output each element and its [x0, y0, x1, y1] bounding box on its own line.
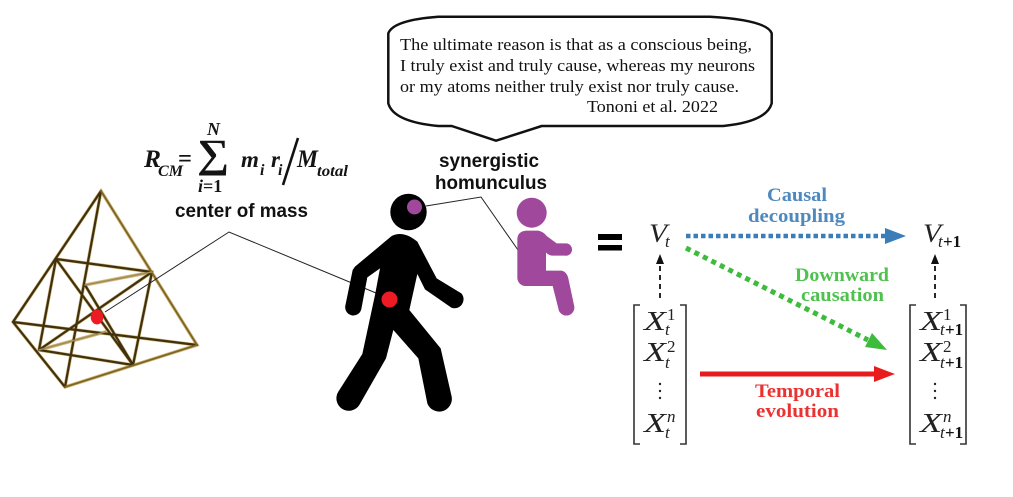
label: causal decoupling: [748, 185, 846, 227]
V t: V: [649, 219, 671, 248]
formula: center of mass: R: [143, 146, 161, 173]
matrix: X t+1: [910, 305, 966, 444]
matrix: X t: X: [643, 306, 668, 336]
arrow: downward causation: [686, 248, 887, 350]
matrix: X t: t: [665, 320, 671, 339]
matrix: X t+1: +1: [945, 353, 963, 372]
matrix: X t+1: t: [940, 353, 946, 372]
matrix: X t: 1: [667, 305, 676, 324]
V t+1: +1: [943, 232, 961, 251]
icon: red center of mass on person: [382, 292, 398, 308]
label: downward causation: Downward: [795, 265, 889, 286]
label: temporal evolution: evolution: [756, 401, 839, 422]
V t: [649, 219, 671, 251]
speech bubble: Tononi et al. 2022: [587, 97, 718, 116]
matrix: X t+1: 1: [943, 305, 952, 324]
V t: t: [665, 232, 671, 251]
label: synergistic homunculus: synergistic: [439, 151, 539, 172]
label: causal decoupling: Causal: [767, 185, 827, 206]
connector: homunculus: [426, 197, 518, 250]
arrow: X t to V t: [656, 254, 664, 298]
speech bubble: [388, 17, 772, 141]
formula: center of mass: CM: [158, 163, 184, 180]
matrix: X t: [634, 305, 686, 444]
matrix: X t+1: +1: [945, 423, 963, 442]
label: center of mass: center of mass: [175, 201, 308, 222]
label: downward causation: [795, 265, 889, 306]
speech bubble: The ultimate reason is that as a conscious being,: [400, 35, 752, 54]
formula: center of mass: N: [206, 119, 221, 139]
matrix: X t+1: X: [919, 306, 944, 336]
arrow: X t+1 to V t+1: [931, 254, 939, 298]
formula: center of mass: total: [317, 163, 349, 180]
formula: center of mass: [143, 119, 349, 196]
formula: center of mass: =1: [203, 176, 222, 196]
matrix: X t: n: [667, 407, 676, 426]
label: downward causation: causation: [801, 285, 884, 306]
V t+1: V: [923, 219, 945, 248]
label: temporal evolution: [755, 381, 840, 422]
matrix: X t: X: [643, 337, 668, 367]
connector: center of mass: [105, 232, 376, 312]
matrix: X t+1: X: [919, 337, 944, 367]
label: synergistic homunculus: homunculus: [435, 173, 547, 194]
arrow: causal decoupling: [686, 228, 906, 244]
matrix: X t: t: [665, 423, 671, 442]
formula: center of mass: =: [178, 146, 192, 172]
matrix: X t+1: t: [940, 423, 946, 442]
icon: homunculus dot in head: [407, 200, 422, 214]
matrix: X t+1: X: [919, 408, 944, 438]
formula: center of mass: i: [260, 162, 265, 179]
formula: center of mass: M: [296, 146, 319, 173]
icon: walking person: [336, 194, 464, 412]
matrix: X t+1: +1: [945, 320, 963, 339]
speech bubble: or my atoms neither truly exist nor truly cause.: [400, 77, 739, 96]
matrix: X t+1: 2: [943, 337, 952, 356]
matrix: X t+1: t: [940, 320, 946, 339]
formula: center of mass: ∑: [197, 131, 229, 176]
arrow: temporal evolution: [700, 366, 895, 382]
formula: center of mass: i: [198, 176, 203, 196]
V t+1: [923, 219, 961, 251]
matrix: X t: 2: [667, 337, 676, 356]
formula: center of mass: i: [278, 162, 283, 179]
matrix: X t: t: [665, 353, 671, 372]
label: synergistic homunculus: [435, 151, 547, 194]
matrix: X t+1: n: [943, 407, 952, 426]
V t+1: t: [938, 232, 944, 251]
speech bubble: I truly exist and truly cause, whereas my neurons: [400, 56, 755, 75]
label: causal decoupling: decoupling: [748, 206, 846, 227]
equals sign: [598, 234, 622, 250]
icon: gold wire tetrahedron: [13, 191, 197, 387]
label: temporal evolution: Temporal: [755, 381, 840, 402]
icon: red center of mass on tetrahedron: [91, 310, 103, 324]
formula: center of mass: r: [271, 147, 281, 172]
formula: center of mass: m: [241, 147, 259, 172]
icon: seated homunculus: [517, 198, 574, 316]
matrix: X t: X: [643, 408, 668, 438]
